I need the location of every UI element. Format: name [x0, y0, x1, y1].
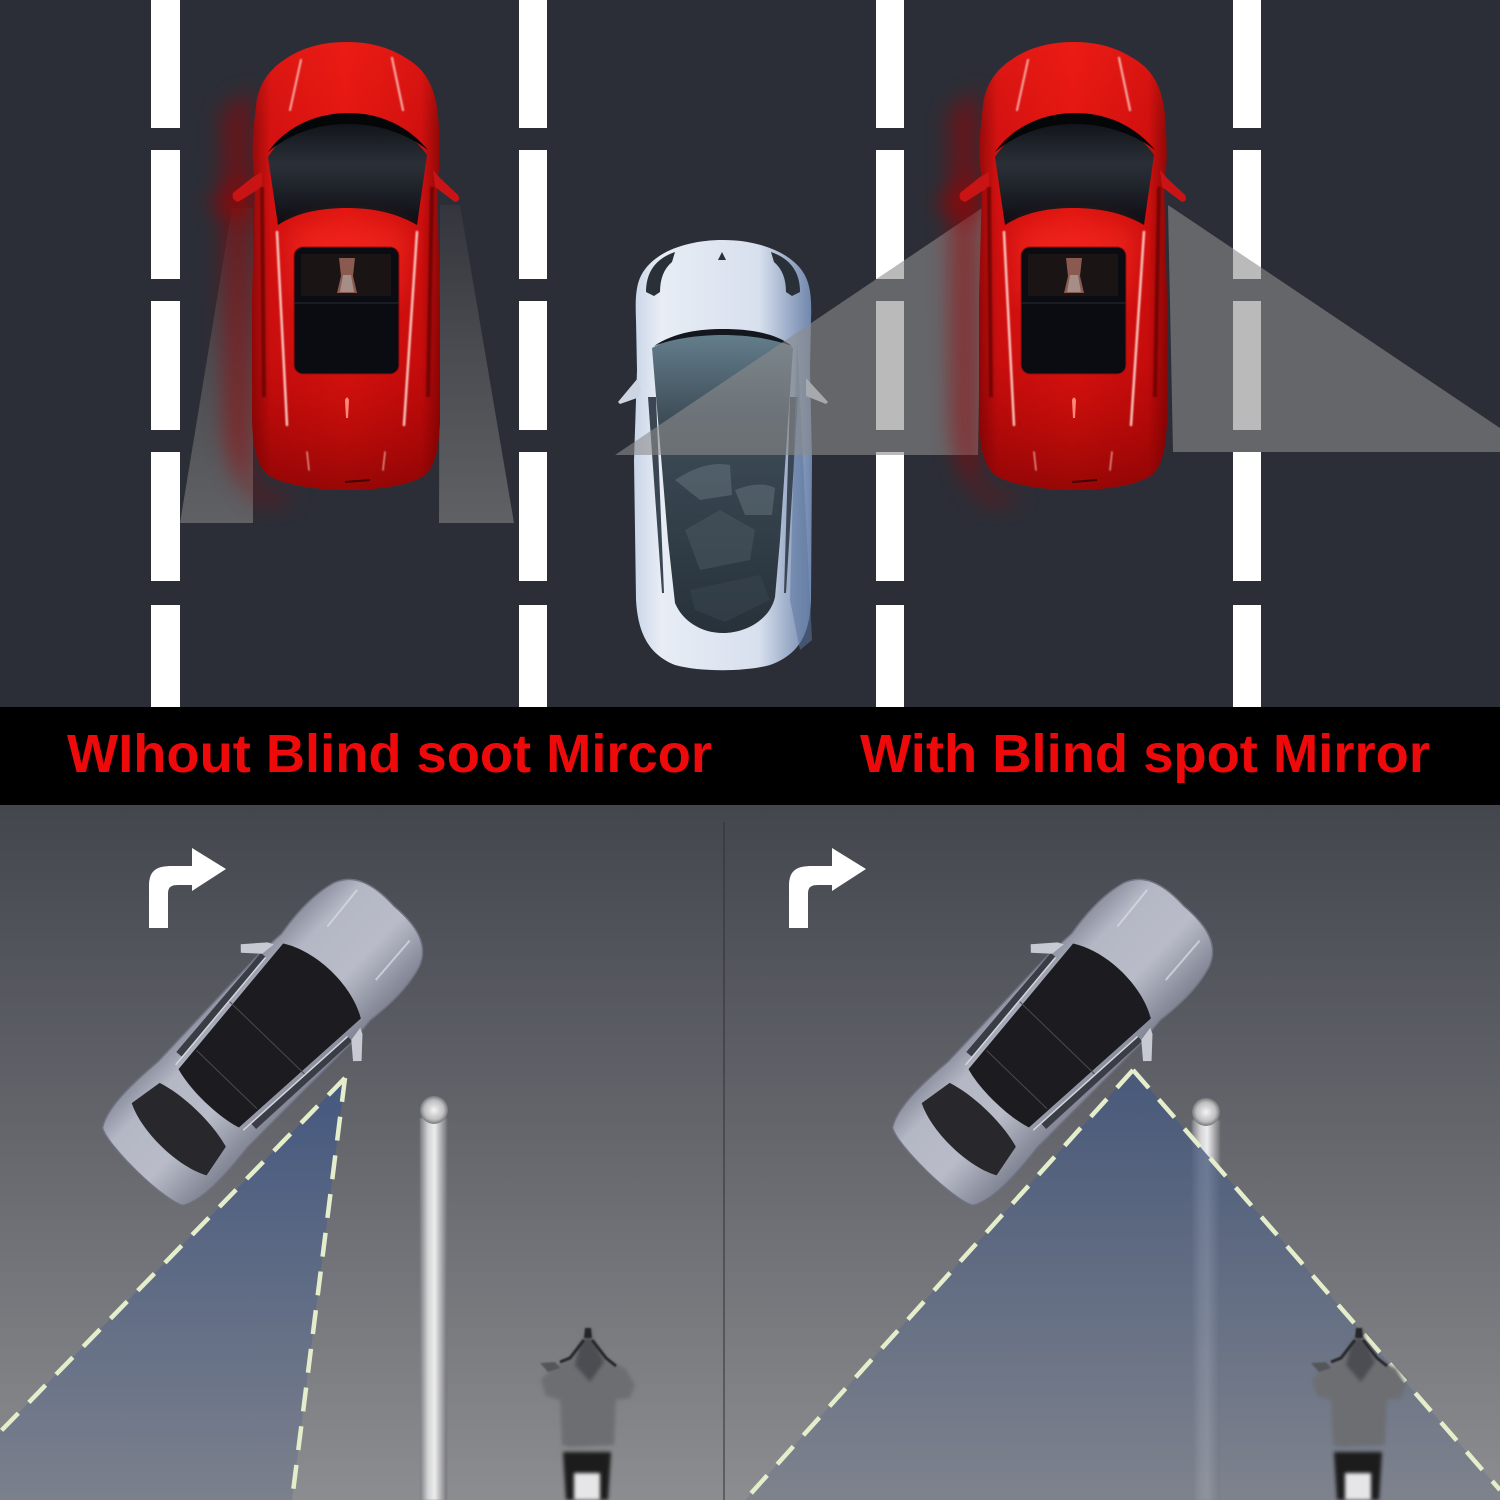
icon: turn right arrow, right: [789, 848, 866, 928]
white car: [618, 240, 828, 670]
silver car: right: [867, 848, 1245, 1230]
icon: turn right arrow, left: [149, 848, 226, 928]
red car: without mirror: [205, 42, 459, 505]
blind spot cone: right: [745, 1070, 1500, 1500]
heading: with mirror: With Blind spot Mirror: [860, 724, 1430, 784]
pole: right: [1192, 1098, 1220, 1500]
silver car: left: [77, 848, 455, 1230]
rider: right: [1311, 1328, 1406, 1500]
pole: left: [420, 1096, 448, 1500]
red car: with mirror: [932, 42, 1186, 505]
rider: left: [540, 1328, 635, 1500]
mirror view cones: without blind spot mirror: [180, 205, 514, 523]
panel: turning scene background: [0, 805, 1500, 1500]
panel: road top: [0, 0, 1500, 708]
divider: [724, 822, 725, 1500]
blind spot cone: left: [0, 1078, 345, 1500]
mirror view cones: with blind spot mirror: [615, 205, 1500, 455]
heading: without mirror: WIhout Blind soot Mircor: [67, 724, 712, 784]
caption band: [0, 707, 1500, 805]
lane dashes: [151, 0, 1261, 708]
